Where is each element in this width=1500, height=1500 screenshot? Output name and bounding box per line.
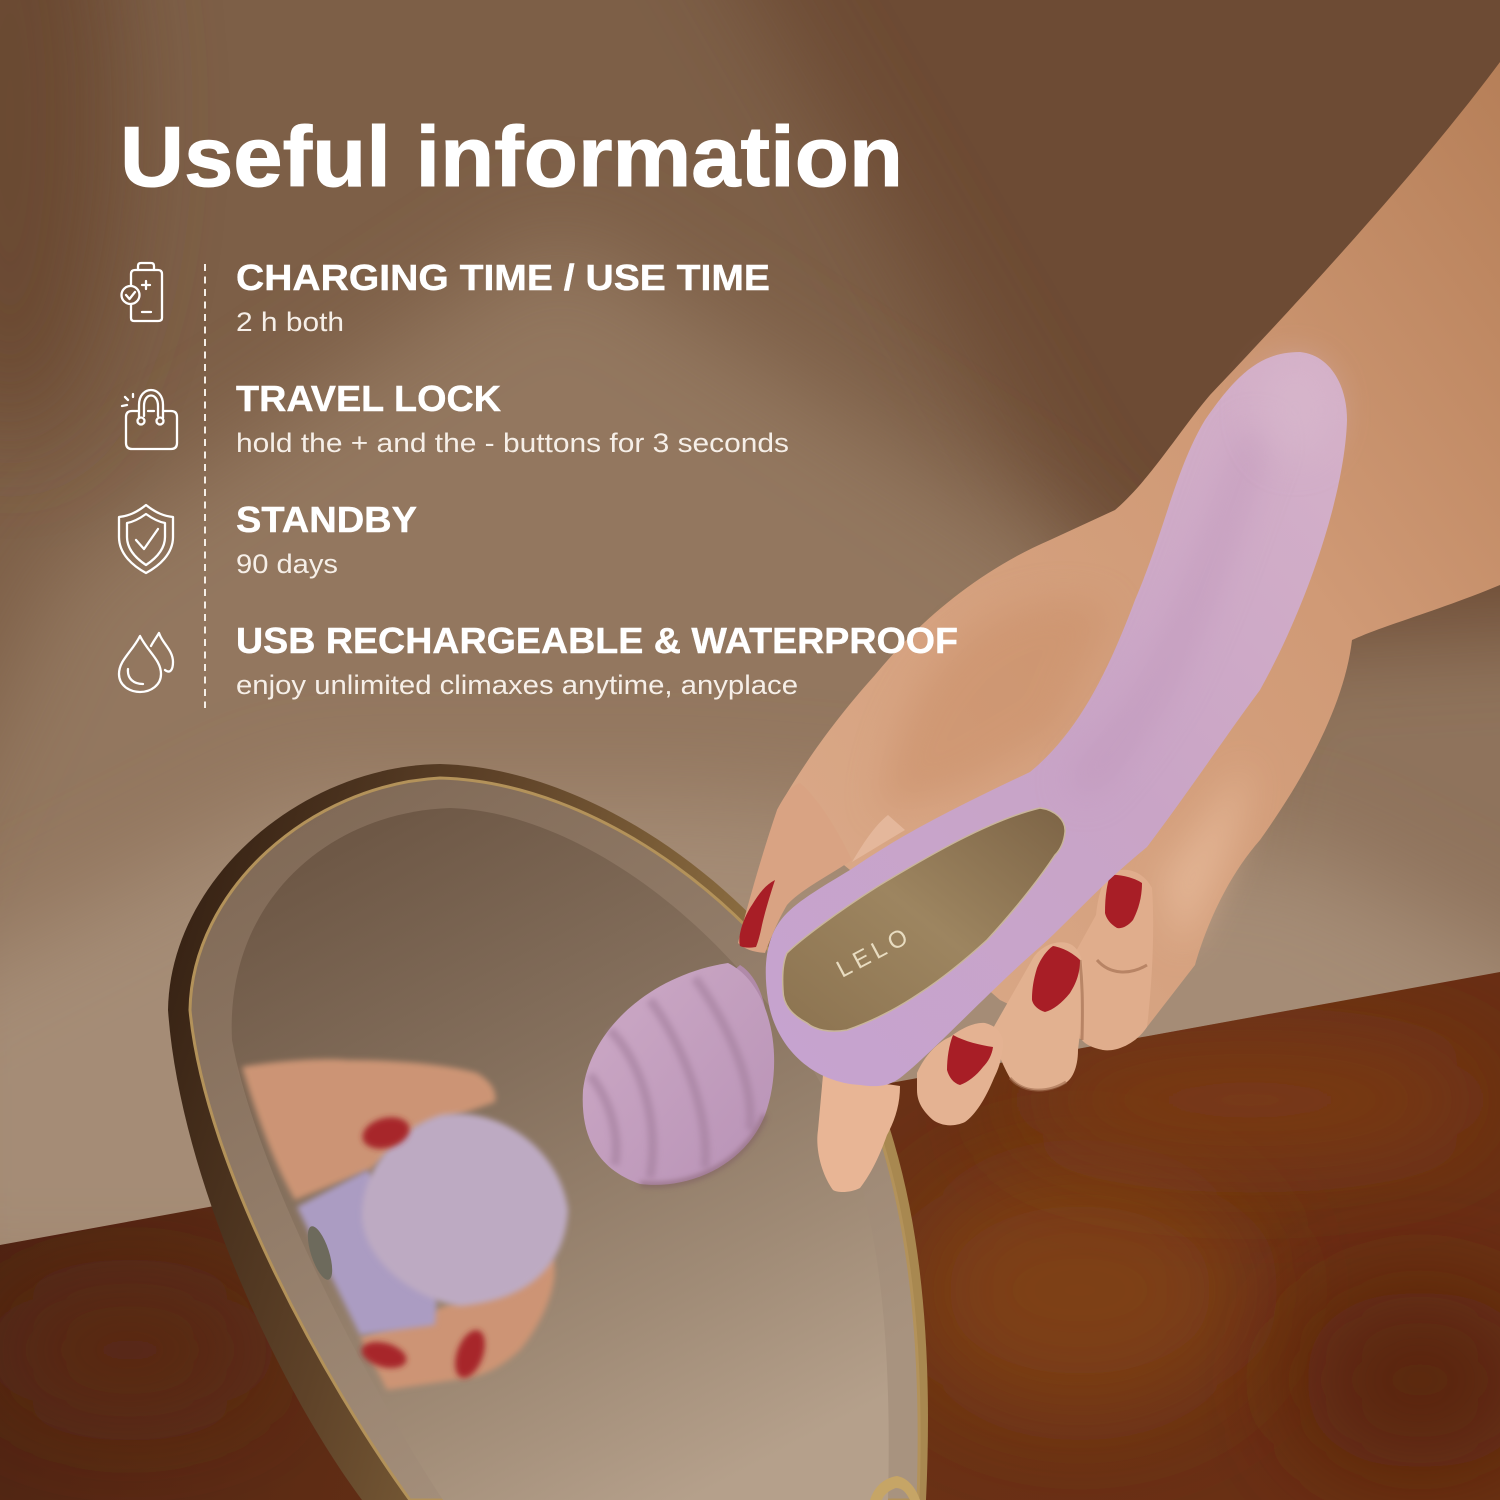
reflected lower fingers: [360, 1258, 555, 1390]
little finger: [1060, 870, 1153, 1050]
mirror: [168, 764, 928, 1500]
mirror glass: [232, 808, 889, 1500]
heading: STANDBY: [236, 499, 417, 540]
dashed divider: [204, 264, 206, 708]
gap between finger and palm: [852, 815, 905, 862]
head shadow: [640, 1115, 765, 1185]
icon: bag with lock: [122, 390, 177, 449]
finger nails: [739, 875, 1142, 1085]
logo: LELO: [832, 921, 917, 983]
arm and hand: [738, 62, 1500, 1192]
detail: hold the + and the - buttons for 3 seconds: [236, 428, 789, 458]
heading: TRAVEL LOCK: [236, 378, 501, 419]
heading: CHARGING TIME / USE TIME: [236, 257, 770, 298]
palm shadow: [880, 600, 1110, 810]
reflected gold panel: [303, 1224, 337, 1282]
icon: water drops: [119, 633, 173, 692]
finger creases: [1010, 960, 1147, 1090]
item: usb and waterproof: [119, 620, 958, 700]
shaft shading: [1075, 430, 1260, 790]
title: Useful information: [120, 110, 903, 205]
ring finger: [992, 942, 1084, 1090]
mirror stand: [870, 1476, 920, 1500]
icon: shield with check: [119, 505, 173, 573]
lower thumb: [817, 1075, 900, 1192]
product head: [583, 963, 774, 1185]
heading: USB RECHARGEABLE & WATERPROOF: [236, 620, 958, 661]
item: travel lock: [122, 378, 789, 458]
reflected upper hand: [242, 1059, 495, 1200]
wooden table: [0, 972, 1500, 1500]
detail: 90 days: [236, 549, 338, 579]
item: charging time: [122, 257, 770, 337]
reflected handle: [297, 1170, 440, 1335]
forearm and palm: [777, 62, 1500, 1050]
product body: [766, 352, 1347, 1086]
palm highlight: [1160, 760, 1250, 950]
product: [583, 352, 1347, 1185]
mirror bevel with gold line: [190, 778, 919, 1500]
icon: battery with check: [122, 263, 162, 321]
reflected nails: [359, 1112, 491, 1382]
middle finger: [917, 1023, 1003, 1125]
mirror outer frame: [168, 764, 928, 1500]
tip highlight: [1257, 360, 1333, 460]
item: standby: [119, 499, 417, 579]
detail: enjoy unlimited climaxes anytime, anyplace: [236, 670, 798, 700]
reflected head: [362, 1114, 568, 1306]
neck: [700, 965, 768, 1090]
index finger: [738, 783, 852, 953]
head ribs: [590, 978, 751, 1178]
gold control panel: [783, 808, 1065, 1031]
detail: 2 h both: [236, 307, 344, 337]
